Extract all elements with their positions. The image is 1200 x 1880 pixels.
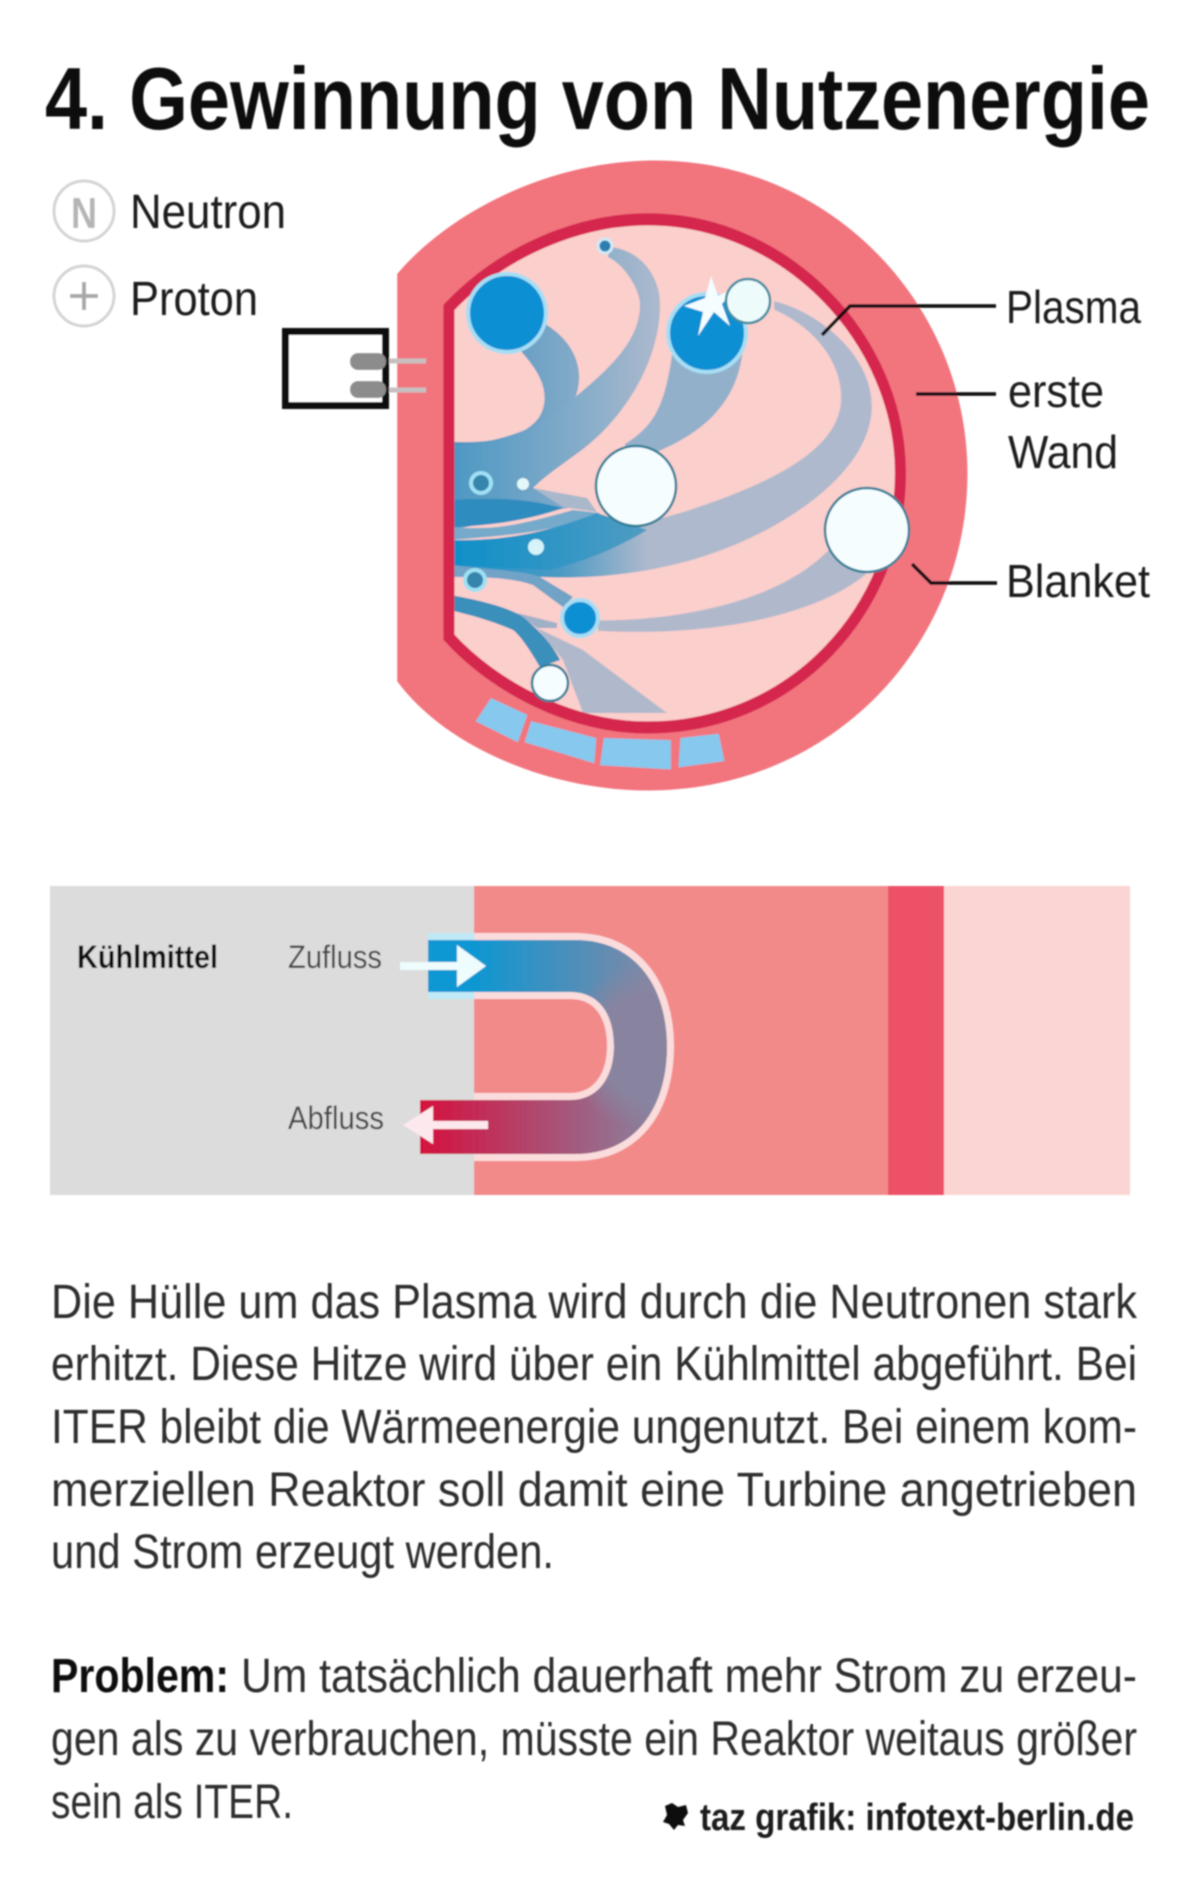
legend: neutron: N: [71, 189, 97, 238]
reactor cross-section: [397, 160, 967, 790]
label: Zufluss: Zufluss: [288, 939, 382, 975]
legend: proton: [54, 266, 258, 326]
arrow: inflow: [400, 945, 486, 987]
panel: coolant diagram: [50, 886, 1130, 1195]
text block: description: und Strom erzeugt werden.: [51, 1526, 554, 1579]
arrow: outflow: [403, 1106, 488, 1144]
text block: problem: [51, 1650, 1137, 1829]
credit: taz grafik: infotext-berlin.de: [700, 1797, 1134, 1839]
label: plasma: [822, 281, 1141, 335]
label: blanket: Blanket: [1006, 555, 1150, 607]
particle trails: [450, 247, 872, 713]
label: blanket: [912, 555, 1150, 607]
legend: neutron: [54, 181, 286, 241]
particles: [465, 239, 909, 701]
legend: neutron: Neutron: [130, 186, 286, 239]
text block: description: [51, 1276, 1138, 1579]
label: erste Wand: Wand: [1008, 426, 1118, 478]
label: erste Wand: erste: [1008, 365, 1104, 417]
coolant tube: [420, 933, 675, 1154]
text block: description: merziellen Reaktor soll damit eine Turbine angetrieben: [51, 1464, 1137, 1517]
first wall: [449, 219, 900, 728]
label: Abfluss: Abfluss: [288, 1100, 384, 1136]
fusion spark: [684, 276, 735, 336]
label: Kühlmittel: Kühlmittel: [77, 939, 218, 975]
detector box: [286, 332, 426, 406]
label: erste Wand: [916, 365, 1118, 478]
label: plasma: Plasma: [1006, 281, 1141, 333]
plasma chamber: [449, 219, 900, 728]
text block: problem: sein als ITER.: [51, 1776, 293, 1829]
blanket: [397, 160, 967, 790]
blanket modules: [476, 698, 724, 770]
legend: proton: Proton: [130, 273, 258, 326]
icon: taz paw: [663, 1803, 688, 1830]
legend: [54, 181, 286, 326]
text block: problem: Problem:: [51, 1650, 229, 1703]
